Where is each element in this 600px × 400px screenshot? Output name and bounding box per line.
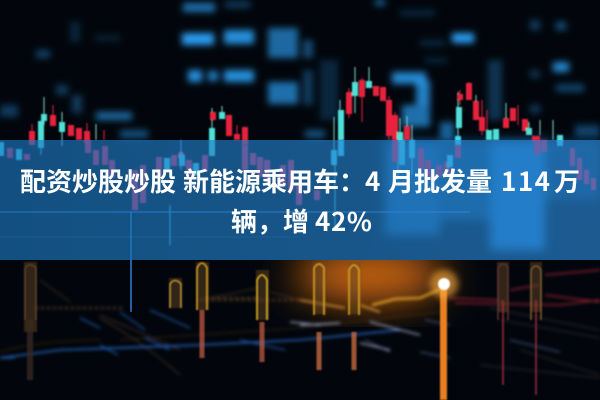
title heading: 42% [315,202,373,239]
title band [0,140,600,260]
orange glow [295,249,445,301]
red traces [450,270,600,305]
blue glow behind the band [385,140,600,250]
warm trace to the spark [372,288,443,305]
title heading: 4 [365,162,380,199]
candlestick chart: series behind band [0,136,596,245]
candle wicks [32,67,553,180]
glass cylinders [24,262,542,395]
title heading: 配资炒股炒股 [20,162,176,199]
title heading [20,162,580,239]
teal candles [38,81,563,156]
orange dashed traces [35,298,300,308]
title heading: 月批发量 [388,162,492,199]
spark light beam [430,270,458,400]
title heading: 万 [554,162,580,199]
blurred blue data glow [0,0,600,140]
title heading: 新能源乘用车： [183,162,365,199]
red candles [29,80,540,145]
blue traces [0,330,400,358]
vertical blue trace [130,260,132,312]
title heading: 114 [501,162,552,199]
circuit traces [0,270,600,378]
candlestick chart: upper series [29,67,563,180]
lower grid lines glow [0,212,470,310]
title heading: 辆，增 [231,202,309,239]
